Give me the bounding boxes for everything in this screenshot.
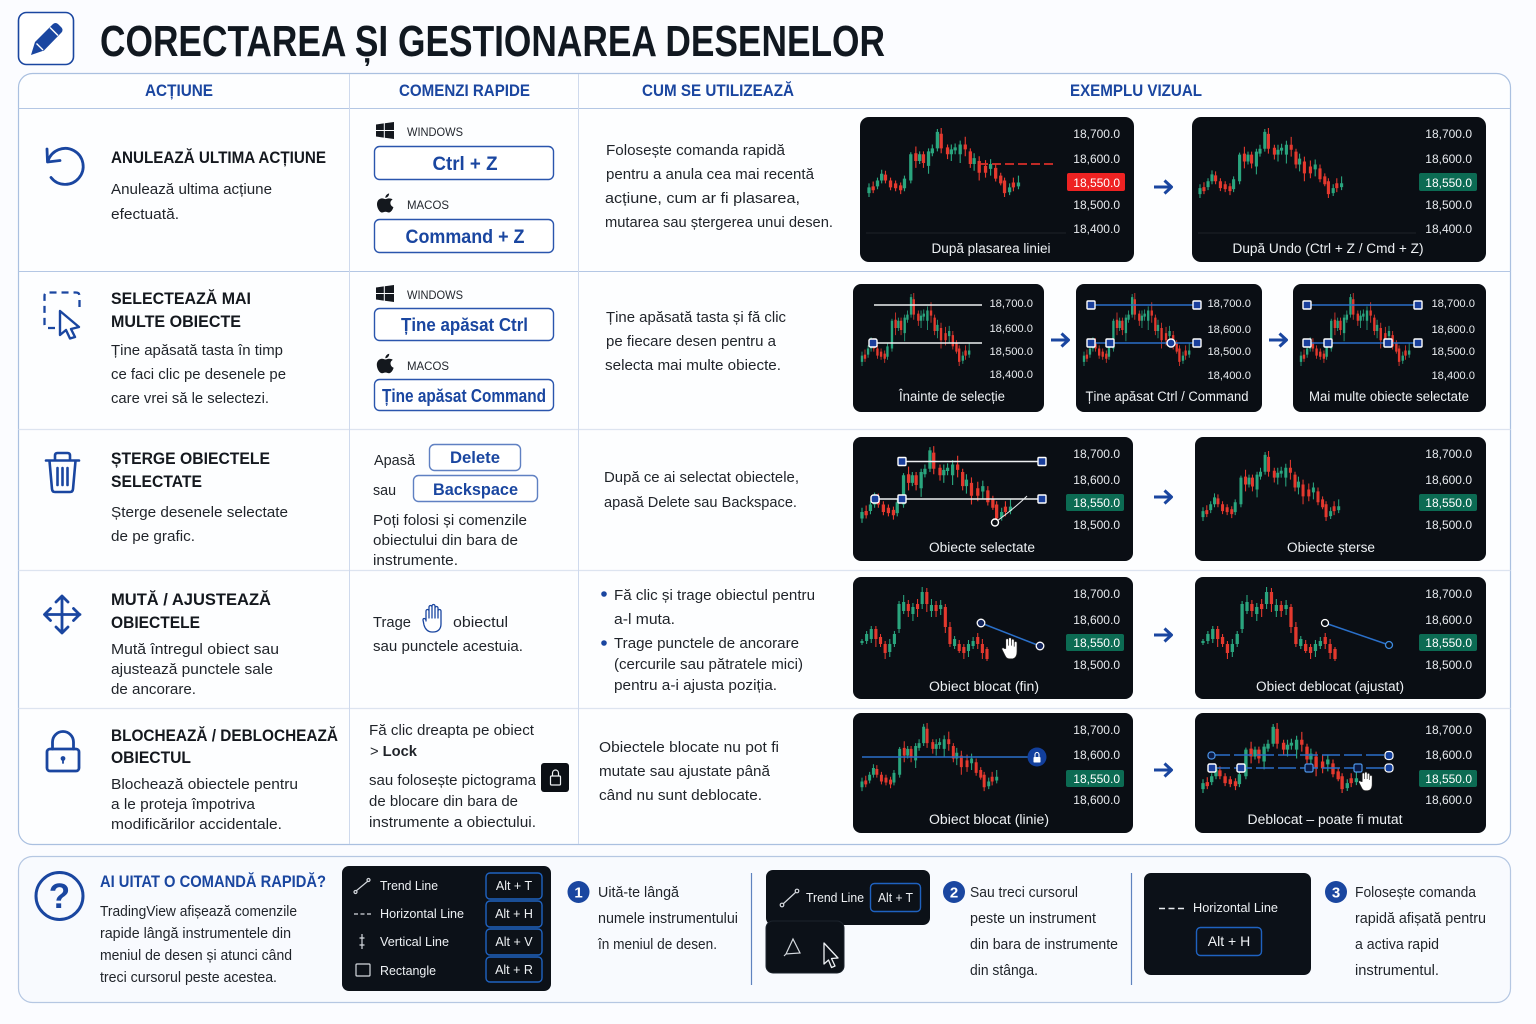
step 3: a activa rapid (1355, 936, 1439, 953)
shortcuts: move (373, 604, 523, 655)
usage text: select (605, 309, 786, 374)
step 2 (943, 881, 1118, 979)
chart: deleted objects (1195, 437, 1486, 561)
icon: pencil badge (18, 12, 74, 64)
shortcuts: lock: de blocare din bara de (369, 793, 518, 810)
shortcuts: lock: Fă clic dreapta pe obiect (369, 722, 535, 739)
usage text: lock (599, 739, 779, 804)
chart: unlocked can move: Deblocat – poate fi mutat (1248, 812, 1403, 827)
action text: undo: ANULEAZĂ ULTIMA ACȚIUNE (111, 148, 326, 167)
tooltip demo: trend line: Trend Line (806, 890, 864, 905)
chart: after placing line (860, 117, 1134, 262)
action text: delete: Șterge desenele selectate (111, 504, 288, 521)
action text: move: OBIECTELE (111, 613, 200, 632)
step 1 (568, 881, 738, 953)
shortcuts: delete: Poți folosi și comenzile (373, 512, 527, 529)
usage text: select: selecta mai multe obiecte. (605, 357, 781, 374)
table header: EXEMPLU VIZUAL (1070, 82, 1202, 100)
chart: selected objects (853, 437, 1133, 561)
usage text: move: pentru a-i ajusta poziția. (614, 677, 777, 694)
shortcut menu: Alt + V (495, 935, 533, 949)
chart: object locked fine: Obiect blocat (fin) (929, 679, 1039, 694)
chart: multiple selected (1293, 284, 1486, 412)
shortcut menu: Trend Line (380, 878, 438, 893)
step 3: Folosește comanda (1355, 884, 1477, 901)
chart: object unlocked adjusted: 18,500.0 (1425, 658, 1472, 672)
panel heading and text: meniul de desen și atunci când (100, 947, 292, 964)
chart: before selection (853, 284, 1044, 412)
chart: locked line: 18,600.0 (1073, 793, 1120, 807)
chart: deleted objects: 18,600.0 (1425, 473, 1472, 487)
chart: after undo: 18,600.0 (1425, 152, 1472, 166)
panel: forgot a shortcut (18, 856, 1510, 1002)
chart: after undo (1192, 117, 1486, 262)
action text: move: ajustează punctele sale (111, 661, 273, 678)
chart: multiple selected: 18,500.0 (1431, 346, 1475, 358)
action text: move: de ancorare. (111, 681, 196, 698)
usage text: undo (605, 142, 833, 231)
shortcuts: delete: Apasă (374, 452, 416, 469)
shortcut menu: Alt + R (495, 963, 533, 977)
chart: multiple selected: 18,600.0 (1431, 324, 1475, 336)
action text: select: care vrei să le selectezi. (111, 390, 269, 407)
chart: locked line: 18,700.0 (1073, 723, 1120, 737)
action text: lock: BLOCHEAZĂ / DEBLOCHEAZĂ (111, 726, 338, 745)
chart: after undo: 18,500.0 (1425, 198, 1472, 212)
chart: object unlocked adjusted: 18,600.0 (1425, 613, 1472, 627)
usage text: select: pe fiecare desen pentru a (606, 333, 777, 350)
chart: unlocked can move: 18,600.0 (1425, 793, 1472, 807)
action text: select: ce faci clic pe desenele pe (111, 366, 286, 383)
action text: delete: SELECTATE (111, 472, 202, 491)
shortcuts: delete: sau (373, 482, 396, 499)
chart: unlocked can move: 18,550.0 (1425, 772, 1472, 786)
shortcuts: move: Trage (373, 614, 411, 631)
action text: select: Ține apăsată tasta în timp (111, 342, 283, 359)
chart: after placing line: După plasarea liniei (932, 241, 1050, 256)
chart: before selection: 18,700.0 (989, 298, 1033, 310)
tooltip demo: trend line: Alt + T (878, 891, 913, 905)
chart: after placing line: 18,550.0 (1073, 176, 1120, 190)
shortcuts: undo: Command + Z (406, 227, 525, 248)
tooltip demo: horizontal line: Alt + H (1208, 933, 1250, 949)
usage text: undo: Folosește comanda rapidă (606, 142, 786, 159)
step 1: 1 (574, 884, 583, 902)
usage text: delete: apasă Delete sau Backspace. (604, 494, 797, 511)
shortcut menu: Horizontal Line (380, 906, 464, 921)
shortcuts: delete: instrumente. (373, 552, 458, 569)
arrow (1154, 764, 1172, 776)
chart: multiple selected: 18,400.0 (1431, 370, 1475, 382)
chart: before selection: 18,400.0 (989, 369, 1033, 381)
usage text: move: a-l muta. (614, 611, 675, 628)
chart: object locked fine: 18,700.0 (1073, 587, 1120, 601)
step 3: rapidă afișată pentru (1355, 910, 1486, 927)
tooltip demo: horizontal line (1144, 873, 1311, 975)
icon: padlock (47, 732, 79, 771)
shortcuts: undo: Ctrl + Z (432, 154, 498, 175)
step 3: instrumentul. (1355, 962, 1439, 979)
table header: ACȚIUNE (145, 82, 213, 100)
chart: object locked fine (853, 577, 1133, 699)
arrow (1154, 180, 1172, 194)
shortcuts: delete: obiectului din bara de (373, 532, 518, 549)
action text: lock: Blochează obiectele pentru (111, 776, 298, 793)
chart: before selection: 18,600.0 (989, 323, 1033, 335)
chart: after undo: 18,550.0 (1425, 176, 1472, 190)
icon: trash can (46, 453, 79, 492)
action text: delete: de pe grafic. (111, 528, 195, 545)
chart: unlocked can move (1195, 713, 1486, 833)
shortcuts: lock: > Lock (370, 743, 418, 760)
chart: locked line: 18,600.0 (1073, 748, 1120, 762)
chart: object locked fine: 18,500.0 (1073, 658, 1120, 672)
tooltip demo: horizontal line: Horizontal Line (1193, 900, 1278, 915)
icon: question mark (36, 872, 83, 920)
icon: lock button (541, 763, 569, 792)
chart: after undo: 18,700.0 (1425, 127, 1472, 141)
usage text: undo: acțiune, cum ar fi plasarea, (605, 190, 800, 207)
chart: holding ctrl (1076, 284, 1262, 412)
chart: selected objects: 18,600.0 (1073, 473, 1120, 487)
chart: after undo: 18,400.0 (1425, 222, 1472, 236)
usage text: undo: mutarea sau ștergerea unui desen. (605, 214, 833, 231)
chart: locked line: Obiect blocat (linie) (929, 812, 1049, 827)
shortcuts: select: Ține apăsat Ctrl (401, 315, 528, 335)
chart: object locked fine: 18,550.0 (1073, 636, 1120, 650)
shortcuts: select (374, 285, 554, 410)
icon: question mark: ? (49, 877, 70, 916)
chart: multiple selected: 18,700.0 (1431, 298, 1475, 310)
step 2: din bara de instrumente (970, 936, 1118, 953)
shortcuts: undo (374, 122, 554, 252)
action text: move: Mută întregul obiect sau (111, 641, 279, 658)
panel heading and text (100, 872, 326, 986)
step 3: 3 (1332, 884, 1340, 902)
action text: select: SELECTEAZĂ MAI (111, 289, 251, 308)
chart: holding ctrl: Ține apăsat Ctrl / Command (1086, 389, 1248, 404)
panel heading and text: AI UITAT O COMANDĂ RAPIDĂ? (100, 872, 326, 891)
chart: unlocked can move: 18,600.0 (1425, 748, 1472, 762)
step 2: 2 (950, 884, 958, 902)
chart: holding ctrl: 18,400.0 (1207, 370, 1251, 382)
arrow (1154, 490, 1172, 504)
action text: lock: modificărilor accidentale. (111, 816, 282, 833)
chart: selected objects: 18,700.0 (1073, 447, 1120, 461)
chart: after placing line: 18,500.0 (1073, 198, 1120, 212)
shortcuts: move: sau punctele acestuia. (373, 638, 523, 655)
step 1: în meniul de desen. (597, 936, 717, 953)
shortcuts: move: obiectul (453, 614, 508, 631)
shortcut menu: Vertical Line (380, 934, 449, 949)
chart: object unlocked adjusted: 18,700.0 (1425, 587, 1472, 601)
row 3: delete (46, 437, 1486, 569)
action text: delete: ȘTERGE OBIECTELE (111, 449, 270, 468)
chart: object locked fine: 18,600.0 (1073, 613, 1120, 627)
chart: deleted objects: 18,700.0 (1425, 447, 1472, 461)
action text: undo: Anulează ultima acțiune (111, 181, 272, 198)
chart: unlocked can move: 18,700.0 (1425, 723, 1472, 737)
shortcuts: lock (369, 722, 569, 831)
usage text: delete (604, 469, 799, 511)
shortcuts: delete: Delete (450, 448, 500, 467)
action text: delete (111, 449, 288, 545)
chart: object unlocked adjusted: Obiect deblocat (ajustat) (1256, 679, 1404, 694)
chart: after undo: După Undo (Ctrl + Z / Cmd + Z) (1232, 241, 1424, 256)
step 3 (1325, 881, 1486, 979)
shortcuts: lock: instrumente a obiectului. (369, 814, 536, 831)
table header: COMENZI RAPIDE (399, 82, 530, 100)
shortcut menu: Alt + H (495, 907, 533, 921)
chart: deleted objects: 18,550.0 (1425, 496, 1472, 510)
chart: before selection: 18,500.0 (989, 346, 1033, 358)
step 1: Uită-te lângă (598, 884, 680, 901)
usage text: move: Trage punctele de ancorare (614, 635, 799, 652)
chart: selected objects: Obiecte selectate (929, 540, 1035, 555)
usage text: move (601, 587, 815, 694)
action text: select (111, 289, 286, 407)
chart: object unlocked adjusted: 18,550.0 (1425, 636, 1472, 650)
chart: selected objects: 18,550.0 (1073, 496, 1120, 510)
icon: hand (423, 604, 441, 632)
chart: object unlocked adjusted (1195, 577, 1486, 699)
arrow (1154, 628, 1172, 642)
chart: after placing line: 18,600.0 (1073, 152, 1120, 166)
row 1: undo (47, 117, 1486, 262)
usage text: lock: mutate sau ajustate până (599, 763, 771, 780)
shortcut menu: Rectangle (380, 963, 436, 978)
chart: deleted objects: Obiecte șterse (1287, 540, 1375, 555)
usage text: select: Ține apăsată tasta și fă clic (606, 309, 786, 326)
shortcut menu: Alt + T (496, 879, 532, 893)
table frame (18, 74, 1510, 844)
chart: selected objects: 18,500.0 (1073, 518, 1120, 532)
table header: CUM SE UTILIZEAZĂ (642, 81, 794, 100)
icon: undo arrow (47, 148, 83, 184)
usage text: undo: pentru a anula cea mai recentă (606, 166, 815, 183)
usage text: lock: când nu sunt deblocate. (599, 787, 762, 804)
shortcut menu (342, 866, 551, 991)
action text: lock: OBIECTUL (111, 748, 191, 767)
chart: deleted objects: 18,500.0 (1425, 518, 1472, 532)
chart: locked line (853, 713, 1133, 833)
panel heading and text: rapide lângă instrumentele din (100, 925, 291, 942)
action text: undo (111, 148, 326, 223)
icon: dashed selection with cursor (44, 292, 80, 338)
shortcuts: delete: Backspace (433, 480, 518, 499)
icon: four-way move (44, 596, 80, 633)
chart: before selection: Înainte de selecție (898, 389, 1005, 404)
row 2: select multiple (44, 284, 1486, 412)
usage text: move: (cercurile sau pătratele mici) (614, 656, 803, 673)
title: CORECTAREA ȘI GESTIONAREA DESENELOR (100, 17, 885, 66)
usage text: delete: După ce ai selectat obiectele, (604, 469, 799, 486)
shortcuts: undo: MACOS (407, 200, 449, 212)
usage text: lock: Obiectele blocate nu pot fi (599, 739, 779, 756)
chart: multiple selected: Mai multe obiecte selectate (1309, 389, 1469, 404)
step 2: din stânga. (970, 962, 1038, 979)
arrow (1051, 334, 1068, 346)
step 2: Sau treci cursorul (970, 884, 1078, 901)
chart: locked line: 18,550.0 (1073, 772, 1120, 786)
chart: after placing line: 18,400.0 (1073, 222, 1120, 236)
shortcuts: lock: sau folosește pictograma (369, 772, 537, 789)
tooltip demo: trend line (766, 870, 930, 973)
action text: lock (111, 726, 338, 833)
action text: undo: efectuată. (111, 206, 179, 223)
shortcuts: select: MACOS (407, 361, 449, 373)
step 1: numele instrumentului (598, 910, 738, 927)
shortcuts: delete (373, 444, 538, 569)
chart: after placing line: 18,700.0 (1073, 127, 1120, 141)
action text: move: MUTĂ / AJUSTEAZĂ (111, 590, 271, 609)
panel heading and text: treci cursorul peste acestea. (100, 969, 277, 986)
step 2: peste un instrument (970, 910, 1097, 927)
chart: holding ctrl: 18,700.0 (1207, 298, 1251, 310)
row 5: lock / unlock (47, 713, 1486, 833)
panel heading and text: TradingView afișează comenzile (100, 903, 297, 920)
action text: move (111, 590, 279, 698)
shortcuts: select: Ține apăsat Command (382, 386, 546, 406)
action text: lock: a le proteja împotriva (111, 796, 256, 813)
chart: holding ctrl: 18,600.0 (1207, 324, 1251, 336)
usage text: move: Fă clic și trage obiectul pentru (614, 587, 815, 604)
action text: select: MULTE OBIECTE (111, 312, 241, 331)
row 4: move / adjust (44, 577, 1486, 699)
table header (145, 81, 1202, 100)
arrow (1269, 334, 1286, 346)
shortcuts: undo: WINDOWS (407, 127, 463, 139)
shortcuts: select: WINDOWS (407, 290, 463, 302)
chart: holding ctrl: 18,500.0 (1207, 346, 1251, 358)
